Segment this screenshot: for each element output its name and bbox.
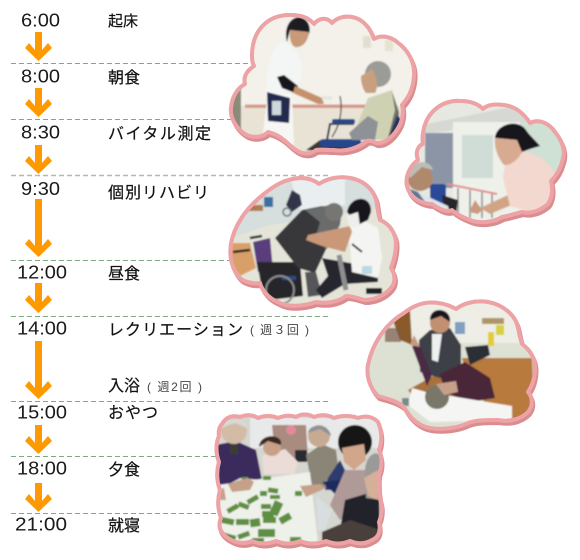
photo: nurse talking with elderly man: [400, 95, 570, 225]
activity labels: バイタル測定: [108, 125, 211, 143]
time labels: 14:00: [17, 318, 67, 338]
photo: nurse checking blood pressure: [225, 10, 420, 160]
arrows: [25, 32, 52, 512]
photo: recreation therapy on mat: [362, 298, 540, 433]
activity labels: 昼食: [108, 265, 140, 283]
time labels: 9:30: [21, 179, 60, 199]
time labels: 12:00: [17, 262, 67, 282]
photo: individual rehabilitation: [225, 175, 400, 310]
time labels: 8:30: [21, 122, 60, 142]
photo: card game with residents: [212, 410, 387, 550]
time labels: 21:00: [15, 514, 67, 534]
time labels: [15, 10, 67, 534]
activity labels: 個別リハビリ: [108, 184, 209, 202]
time labels: 18:00: [17, 458, 67, 478]
activity labels: ( 週2回 ): [147, 380, 202, 394]
activity labels: 朝食: [108, 69, 140, 87]
activity labels: レクリエーション: [108, 321, 243, 339]
activity labels: 夕食: [108, 461, 140, 479]
activity labels: 就寝: [108, 517, 140, 535]
activity labels: ( 週３回 ): [250, 323, 309, 337]
time labels: 15:00: [17, 402, 67, 422]
activity labels: [108, 13, 309, 535]
time labels: 8:00: [21, 66, 60, 86]
activity labels: 入浴: [108, 377, 140, 395]
activity labels: おやつ: [108, 404, 158, 422]
time labels: 6:00: [21, 10, 60, 30]
activity labels: 起床: [108, 13, 138, 30]
